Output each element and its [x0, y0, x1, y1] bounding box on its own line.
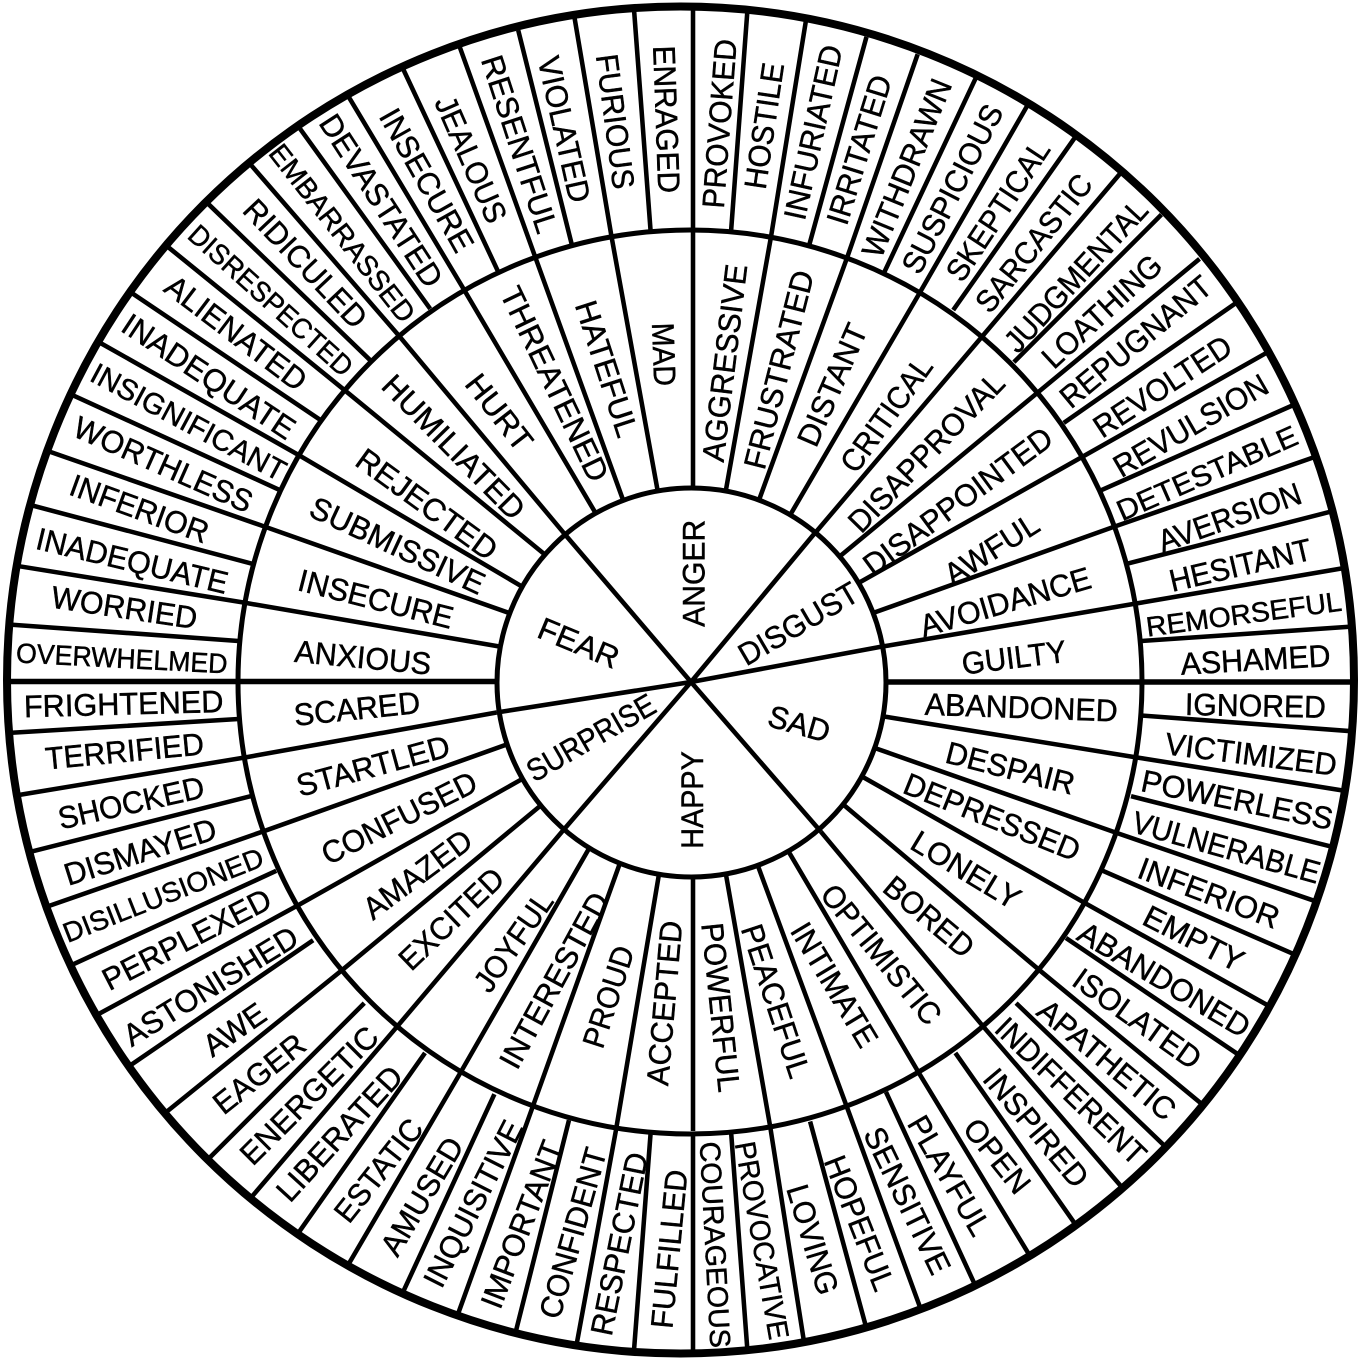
INFURIATED: INFURIATED	[777, 42, 850, 223]
INTERESTED: INTERESTED	[492, 886, 617, 1075]
LONELY: LONELY	[905, 824, 1027, 917]
ESTATIC: ESTATIC	[327, 1112, 430, 1229]
AGGRESSIVE: AGGRESSIVE	[696, 262, 754, 464]
RIDICULED: RIDICULED	[236, 192, 374, 335]
GUILTY: GUILTY	[960, 634, 1068, 682]
top-right outer labels	[696, 38, 1343, 682]
POWERFUL: POWERFUL	[694, 921, 747, 1094]
STARTLED: STARTLED	[293, 729, 454, 804]
INDIFFERENT: INDIFFERENT	[988, 1010, 1153, 1172]
DISTANT: DISTANT	[790, 318, 875, 452]
AMUSED: AMUSED	[373, 1131, 471, 1262]
core label: HAPPY: HAPPY	[675, 751, 710, 849]
REJECTED: REJECTED	[349, 442, 504, 567]
PEACEFUL: PEACEFUL	[734, 920, 817, 1082]
INADEQUATE: INADEQUATE	[33, 521, 231, 601]
spokes dividing the core emotions	[496, 531, 885, 832]
ENRAGED: ENRAGED	[646, 45, 686, 194]
core label: SURPRISE: SURPRISE	[520, 687, 662, 789]
IGNORED: IGNORED	[1185, 687, 1326, 725]
POWERLESS: POWERLESS	[1138, 763, 1336, 837]
FURIOUS: FURIOUS	[589, 52, 641, 191]
EAGER: EAGER	[206, 1027, 313, 1121]
INFERIOR: INFERIOR	[1133, 851, 1284, 936]
INFERIOR: INFERIOR	[65, 468, 214, 550]
ACCEPTED: ACCEPTED	[640, 919, 689, 1087]
VULNERABLE: VULNERABLE	[1128, 805, 1324, 891]
core label: ANGER: ANGER	[676, 520, 711, 627]
THREATENED: THREATENED	[493, 281, 616, 487]
INQUISITIVE: INQUISITIVE	[417, 1115, 530, 1293]
bottom-left middle labels	[292, 685, 689, 1087]
bottom-right middle labels	[694, 687, 1118, 1094]
EMBARRASSED: EMBARRASSED	[263, 137, 422, 329]
ALIENATED: ALIENATED	[158, 268, 314, 398]
HOSTILE: HOSTILE	[738, 60, 791, 191]
PLAYFUL: PLAYFUL	[900, 1109, 998, 1242]
RESPECTED: RESPECTED	[584, 1149, 655, 1338]
OVERWHELMED: OVERWHELMED	[15, 637, 228, 679]
APATHETIC: APATHETIC	[1031, 992, 1183, 1128]
core emotions	[520, 520, 865, 849]
ABANDONED: ABANDONED	[1072, 915, 1256, 1045]
AVOIDANCE: AVOIDANCE	[916, 561, 1095, 644]
INADEQUATE: INADEQUATE	[115, 307, 302, 446]
HESITANT: HESITANT	[1166, 532, 1315, 599]
DISAPPOINTED: DISAPPOINTED	[856, 420, 1059, 583]
REVULSION: REVULSION	[1107, 367, 1274, 484]
ISOLATED: ISOLATED	[1066, 961, 1208, 1076]
ASTONISHED: ASTONISHED	[117, 919, 304, 1053]
SUBMISSIVE: SUBMISSIVE	[304, 490, 490, 602]
SENSITIVE: SENSITIVE	[857, 1121, 958, 1280]
INSECURE: INSECURE	[372, 102, 481, 258]
DISAPPROVAL: DISAPPROVAL	[841, 365, 1012, 539]
CRITICAL: CRITICAL	[833, 350, 940, 479]
top-left outer labels	[15, 45, 686, 679]
WORTHLESS: WORTHLESS	[68, 410, 258, 520]
HURT: HURT	[458, 367, 540, 458]
FRUSTRATED: FRUSTRATED	[737, 267, 821, 473]
REMORSEFUL: REMORSEFUL	[1144, 586, 1343, 643]
LOVING: LOVING	[779, 1180, 845, 1299]
REVOLTED: REVOLTED	[1087, 329, 1238, 445]
IMPORTANT: IMPORTANT	[474, 1136, 570, 1313]
inner circle	[497, 488, 886, 877]
EMPTY: EMPTY	[1137, 898, 1250, 979]
AWE: AWE	[196, 996, 273, 1064]
DISILLUSIONED: DISILLUSIONED	[59, 842, 268, 949]
SARCASTIC: SARCASTIC	[968, 167, 1100, 319]
INTIMATE: INTIMATE	[783, 916, 885, 1053]
VIOLATED: VIOLATED	[531, 53, 597, 206]
bottom-right outer labels	[693, 687, 1339, 1349]
DESPAIR: DESPAIR	[942, 735, 1078, 802]
JUDGMENTAL: JUDGMENTAL	[997, 192, 1155, 359]
AVERSION: AVERSION	[1153, 476, 1306, 559]
REPUGNANT: REPUGNANT	[1053, 269, 1219, 415]
JOYFUL: JOYFUL	[467, 885, 560, 999]
SCARED: SCARED	[292, 685, 422, 733]
FULFILLED: FULFILLED	[644, 1168, 695, 1330]
ENERGETIC: ENERGETIC	[233, 1019, 386, 1172]
ABANDONED: ABANDONED	[924, 687, 1118, 728]
HOPEFUL: HOPEFUL	[817, 1151, 902, 1296]
COURAGEOUS: COURAGEOUS	[693, 1141, 735, 1349]
bottom-left outer labels	[23, 684, 695, 1338]
PROUD: PROUD	[576, 941, 642, 1052]
EXCITED: EXCITED	[392, 861, 511, 977]
HATEFUL: HATEFUL	[568, 296, 645, 441]
INSIGNIFICANT: INSIGNIFICANT	[85, 357, 291, 488]
FRIGHTENED: FRIGHTENED	[23, 684, 224, 724]
PROVOKED: PROVOKED	[696, 38, 744, 210]
core label: SAD: SAD	[764, 699, 834, 750]
DISRESPECTED: DISRESPECTED	[182, 218, 360, 382]
MAD: MAD	[645, 322, 682, 387]
core label: DISGUST: DISGUST	[732, 575, 865, 673]
ANXIOUS: ANXIOUS	[293, 634, 433, 682]
middle ring labels	[292, 262, 1118, 1094]
OPTIMISTIC: OPTIMISTIC	[813, 877, 949, 1032]
INSECURE: INSECURE	[295, 563, 457, 636]
DEPRESSED: DEPRESSED	[899, 766, 1085, 868]
SUSPICIOUS: SUSPICIOUS	[895, 99, 1010, 279]
WITHDRAWN: WITHDRAWN	[855, 74, 959, 262]
PROVOCATIVE: PROVOCATIVE	[728, 1139, 794, 1342]
LIBERATED: LIBERATED	[269, 1059, 410, 1208]
CONFUSED: CONFUSED	[316, 765, 483, 872]
DEVASTATED: DEVASTATED	[312, 108, 450, 294]
JEALOUS: JEALOUS	[428, 91, 514, 228]
DETESTABLE: DETESTABLE	[1112, 420, 1303, 528]
WORRIED: WORRIED	[49, 580, 200, 636]
LOATHING: LOATHING	[1035, 248, 1169, 375]
AMAZED: AMAZED	[356, 822, 479, 926]
middle ring circle	[238, 230, 1142, 1134]
IRRITATED: IRRITATED	[820, 71, 899, 229]
HUMILIATED: HUMILIATED	[375, 368, 532, 527]
PERPLEXED: PERPLEXED	[96, 882, 277, 997]
TERRIFIED: TERRIFIED	[44, 726, 205, 776]
VICTIMIZED: VICTIMIZED	[1163, 726, 1339, 783]
INSPIRED: INSPIRED	[976, 1062, 1096, 1195]
BORED: BORED	[876, 869, 981, 965]
AWFUL: AWFUL	[938, 506, 1046, 592]
CONFIDENT: CONFIDENT	[533, 1144, 614, 1322]
ASHAMED: ASHAMED	[1180, 638, 1331, 682]
OPEN: OPEN	[956, 1112, 1038, 1201]
top-left middle labels	[293, 281, 682, 682]
RESENTFUL: RESENTFUL	[474, 51, 564, 237]
top-right middle labels	[696, 262, 1095, 682]
SHOCKED: SHOCKED	[55, 770, 208, 836]
SKEPTICAL: SKEPTICAL	[939, 134, 1057, 288]
DISMAYED: DISMAYED	[60, 811, 221, 893]
core label: FEAR: FEAR	[533, 611, 624, 676]
